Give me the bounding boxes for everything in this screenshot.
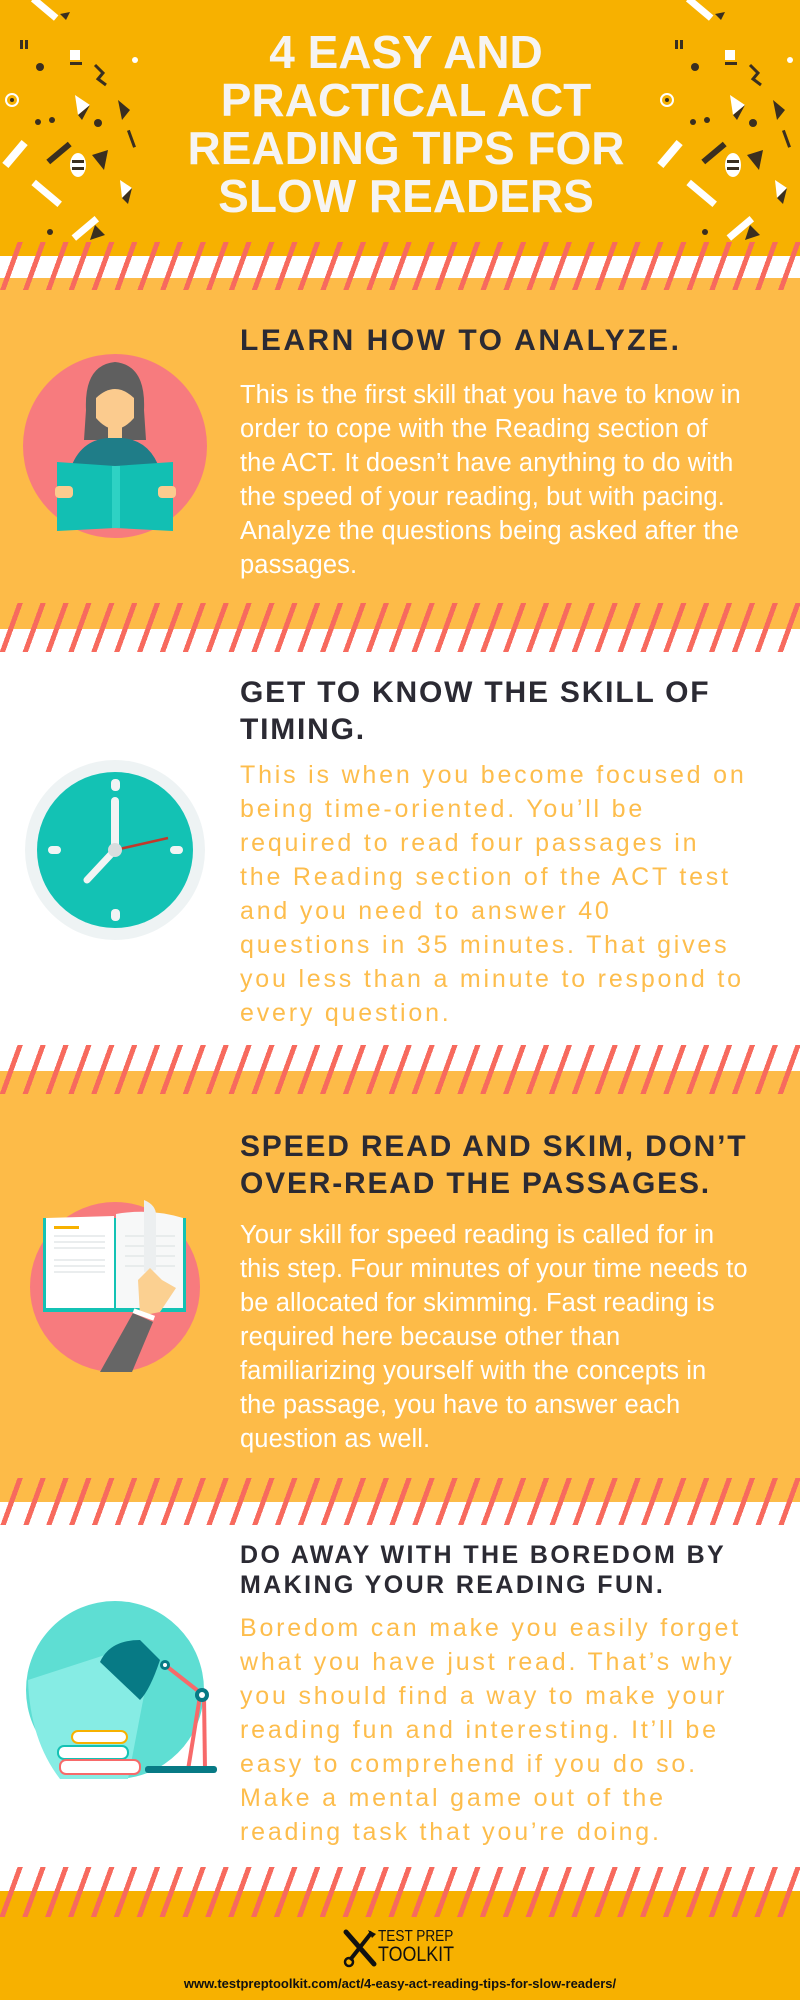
icon: open book with hand <box>30 1200 200 1372</box>
text block 4: reading fun and interesting. It’ll be <box>240 1716 719 1744</box>
text block 3: this step. Four minutes of your time needs to <box>240 1255 748 1283</box>
text block 2: the Reading section of the ACT test <box>240 863 731 891</box>
stripe band 2 <box>0 603 800 652</box>
text block 3 <box>240 1221 748 1453</box>
text block 1: the speed of your reading, but with pacing. <box>240 483 725 511</box>
text block 2: and you need to answer 40 <box>240 897 612 925</box>
text block 3: familiarizing yourself with the concepts in <box>240 1357 706 1385</box>
icon: crossed tools <box>344 1930 376 1968</box>
text block 1: This is the first skill that you have to know in <box>240 381 741 409</box>
text block 1 <box>240 381 741 579</box>
stripe band 1 <box>0 242 800 290</box>
heading 3: SPEED READ AND SKIM, DON’T <box>240 1130 747 1163</box>
text block 4: Boredom can make you easily forget <box>240 1614 741 1642</box>
text block 1: passages. <box>240 551 357 579</box>
text block 3: the passage, you have to answer each <box>240 1391 680 1419</box>
stripe band 4 <box>0 1478 800 1525</box>
heading 3: OVER-READ THE PASSAGES. <box>240 1167 711 1200</box>
heading 4: DO AWAY WITH THE BOREDOM BY <box>240 1541 726 1569</box>
heading 4: MAKING YOUR READING FUN. <box>240 1571 665 1599</box>
title: SLOW READERS <box>218 170 594 222</box>
text block 3: Your skill for speed reading is called for in <box>240 1221 714 1249</box>
text block 4: what you have just read. That’s why <box>240 1648 735 1676</box>
title: PRACTICAL ACT <box>221 74 591 126</box>
text block 4: you should find a way to make your <box>240 1682 727 1710</box>
heading 2 <box>240 676 710 746</box>
heading 2: TIMING. <box>240 713 366 746</box>
heading 3 <box>240 1130 747 1200</box>
stripe band 5 <box>0 1867 800 1917</box>
icon: clock <box>25 760 205 940</box>
text block 2: required to read four passages in <box>240 829 699 857</box>
logo text: TOOLKIT <box>378 1943 454 1966</box>
panel: section 4 <box>0 1525 800 1867</box>
text block 3: question as well. <box>240 1425 430 1453</box>
heading 4 <box>240 1541 726 1599</box>
panel: section 1 <box>0 290 800 603</box>
text block 1: the ACT. It doesn’t have anything to do with <box>240 449 733 477</box>
header background <box>0 0 800 256</box>
text block 4: easy to comprehend if you do so. <box>240 1750 698 1778</box>
text block 3: be allocated for skimming. Fast reading is <box>240 1289 715 1317</box>
heading 2: GET TO KNOW THE SKILL OF <box>240 676 710 709</box>
text block 2: every question. <box>240 999 452 1027</box>
text block 1: Analyze the questions being asked after the <box>240 517 739 545</box>
text block 2: questions in 35 minutes. That gives <box>240 931 729 959</box>
icon: woman reading <box>23 354 207 538</box>
text block 3: required here because other than <box>240 1323 620 1351</box>
logo text: TEST PREP <box>378 1928 453 1945</box>
title: 4 EASY AND <box>269 26 543 78</box>
text block 1: order to cope with the Reading section of <box>240 415 708 443</box>
title: READING TIPS FOR <box>187 122 625 174</box>
text block 4 <box>240 1614 741 1846</box>
stripe band 3 <box>0 1045 800 1094</box>
panel: section 3 <box>0 1094 800 1478</box>
url: www.testpreptoolkit.com/act/4-easy-act-reading-tips-for-slow-readers/ <box>184 1976 616 1991</box>
text block 2: being time-oriented. You’ll be <box>240 795 645 823</box>
text block 4: reading task that you’re doing. <box>240 1818 662 1846</box>
logo text <box>378 1928 454 1966</box>
icon: desk lamp with books <box>26 1601 217 1779</box>
text block 2: you less than a minute to respond to <box>240 965 744 993</box>
title <box>187 26 625 222</box>
text block 2 <box>240 761 747 1027</box>
text block 4: Make a mental game out of the <box>240 1784 666 1812</box>
panel: section 2 <box>0 652 800 1045</box>
header confetti decoration <box>2 0 793 241</box>
panel: footer <box>0 1917 800 2000</box>
logo: test prep toolkit <box>344 1928 454 1968</box>
heading 1: LEARN HOW TO ANALYZE. <box>240 324 681 357</box>
text block 2: This is when you become focused on <box>240 761 747 789</box>
